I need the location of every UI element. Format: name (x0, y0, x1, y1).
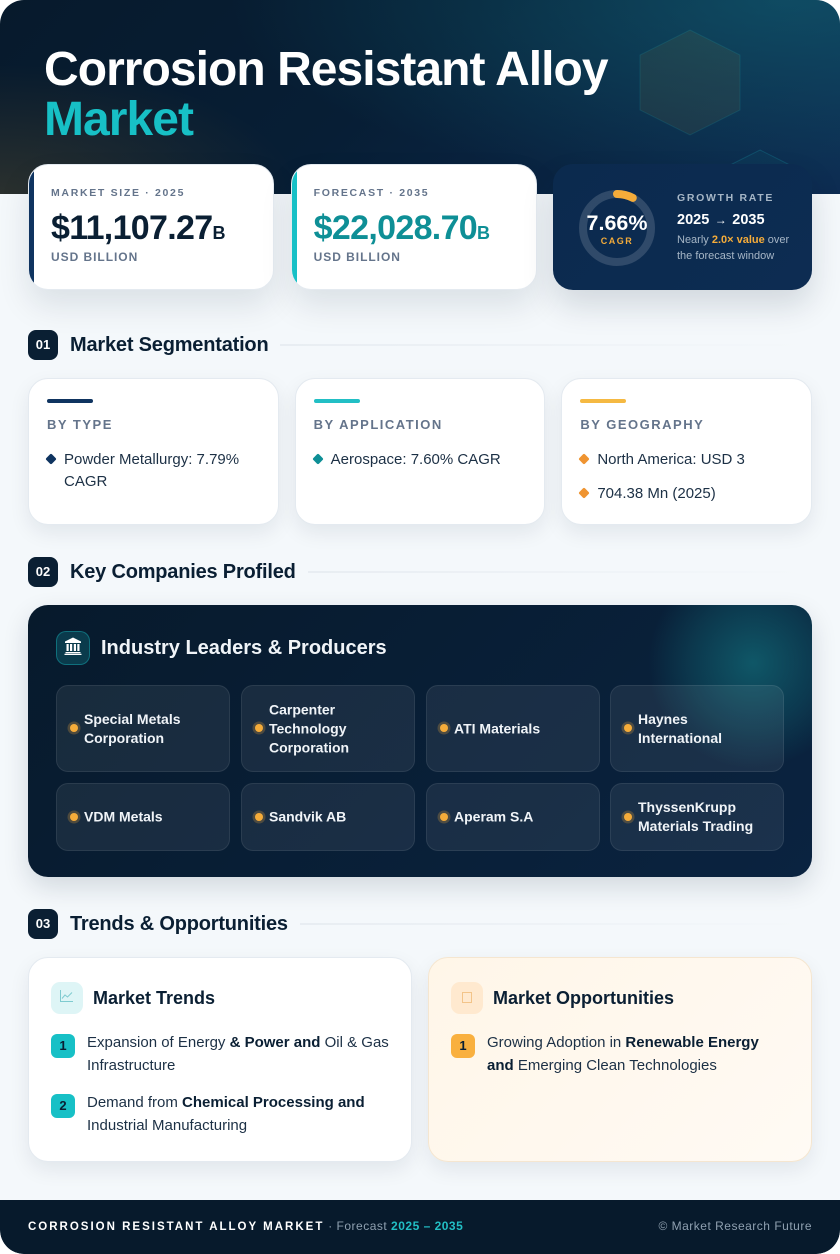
stat card: forecast (291, 164, 537, 290)
panel: market opportunities (428, 957, 812, 1162)
stat card: market size: $11,107.27B (51, 209, 226, 247)
company: Carpenter: Technology (269, 720, 347, 736)
growth text: GROWTH RATE (677, 192, 774, 204)
company: Haynes (610, 685, 784, 772)
icon: chart (51, 982, 83, 1014)
panel: market trends (28, 957, 412, 1162)
stat card: forecast: $22,028.70B (314, 209, 490, 247)
icon: missing glyph box (451, 982, 483, 1014)
section heading 03 (28, 909, 468, 939)
panel: by application: Aerospace: 7.60% CAGR (331, 451, 501, 468)
section heading 01: 01 (36, 337, 50, 352)
donut gauge (579, 190, 655, 266)
panel: companies (28, 605, 812, 877)
company: Sandvik (241, 783, 415, 850)
panel: by type: BY TYPE (47, 417, 113, 432)
section heading 02: Key Companies Profiled (70, 561, 296, 583)
company: ThyssenKrupp: Materials Trading (638, 818, 753, 834)
panel heading: Industry Leaders & Producers (101, 637, 387, 659)
stat card: forecast: FORECAST · 2035 (314, 187, 429, 199)
company: ThyssenKrupp (610, 783, 784, 850)
heading: Market Opportunities (493, 988, 674, 1008)
company: Special Metals (56, 685, 230, 772)
opportunity 1 (451, 1034, 475, 1058)
section heading 02 (28, 557, 474, 587)
heading: Market Trends (93, 988, 215, 1008)
company: VDM: VDM Metals (84, 809, 163, 825)
trend 2: 2 (59, 1098, 67, 1113)
company: Special Metals: Corporation (84, 730, 164, 746)
panel: by application: BY APPLICATION (314, 417, 443, 432)
decorative hexagons (640, 30, 788, 164)
copyright: © Market Research Future (658, 1219, 812, 1233)
company: Carpenter: Carpenter (269, 701, 335, 717)
trend 1: 1 (59, 1038, 67, 1053)
company: Haynes: International (638, 730, 722, 746)
section heading 01 (28, 330, 456, 360)
icon: institution (56, 631, 90, 665)
company: ATI (426, 685, 600, 772)
title (44, 43, 608, 146)
company: Sandvik: Sandvik AB (269, 809, 346, 825)
stat card: growth rate: Nearly 2.0× value over (677, 234, 789, 246)
panel: market trends: Industrial Manufacturing (87, 1117, 247, 1134)
panel: market opportunities: and Emerging Clean Technologies (487, 1057, 717, 1074)
stat card: growth rate: CAGR (601, 236, 633, 246)
panel: by geography: BY GEOGRAPHY (580, 417, 704, 432)
cagr value: 7.66% (587, 211, 647, 235)
panel: by geography (561, 378, 812, 525)
footer title: CORROSION RESISTANT ALLOY MARKET · Forecast 2025 – 2035 (28, 1219, 463, 1233)
company: Special Metals: Special Metals (84, 711, 180, 727)
section heading 02: 02 (36, 564, 50, 579)
header band (0, 0, 840, 194)
panel: by geography: 704.38 Mn (2025) (597, 485, 716, 502)
panel: by type (28, 378, 279, 525)
opportunity 1: 1 (459, 1038, 467, 1053)
company: Aperam (426, 783, 600, 850)
company: Carpenter (241, 685, 415, 772)
stat card: growth rate: the forecast window (677, 250, 774, 262)
stat card: market size (28, 164, 274, 290)
panel: by geography: North America: USD 3 (597, 451, 745, 468)
stat card: growth rate: 2025 2035 (677, 212, 765, 228)
trend 1 (51, 1034, 75, 1058)
company: Carpenter: Corporation (269, 739, 349, 755)
panel: market trends: Expansion of Energy & Power and Oil & Gas (87, 1034, 389, 1051)
panel: market trends: Infrastructure (87, 1057, 175, 1074)
panel: market opportunities: Growing Adoption in Renewable Energy (487, 1034, 759, 1051)
trend 2 (51, 1094, 75, 1118)
company: Aperam: Aperam S.A (454, 809, 533, 825)
stat card: market size: MARKET SIZE · 2025 (51, 187, 185, 199)
section heading 03: Trends & Opportunities (70, 913, 288, 935)
stat card: growth rate: → (715, 213, 727, 227)
panel: by type: Powder Metallurgy: 7.79% CAGR (64, 451, 239, 490)
company: Haynes: Haynes (638, 711, 688, 727)
company: ATI: ATI Materials (454, 720, 540, 736)
company: VDM (56, 783, 230, 850)
panel: market trends: Demand from Chemical Processing and (87, 1094, 365, 1111)
stat card: forecast: USD BILLION (314, 250, 401, 264)
stat card: growth rate (553, 164, 812, 290)
section heading 01: Market Segmentation (70, 334, 268, 356)
section heading 03: 03 (36, 916, 50, 931)
footer (0, 1200, 840, 1254)
stat card: market size: USD BILLION (51, 250, 138, 264)
title: Corrosion Resistant Alloy (44, 43, 608, 96)
company: ThyssenKrupp: ThyssenKrupp (638, 799, 736, 815)
panel: by application (295, 378, 545, 525)
title: Market (44, 93, 193, 146)
